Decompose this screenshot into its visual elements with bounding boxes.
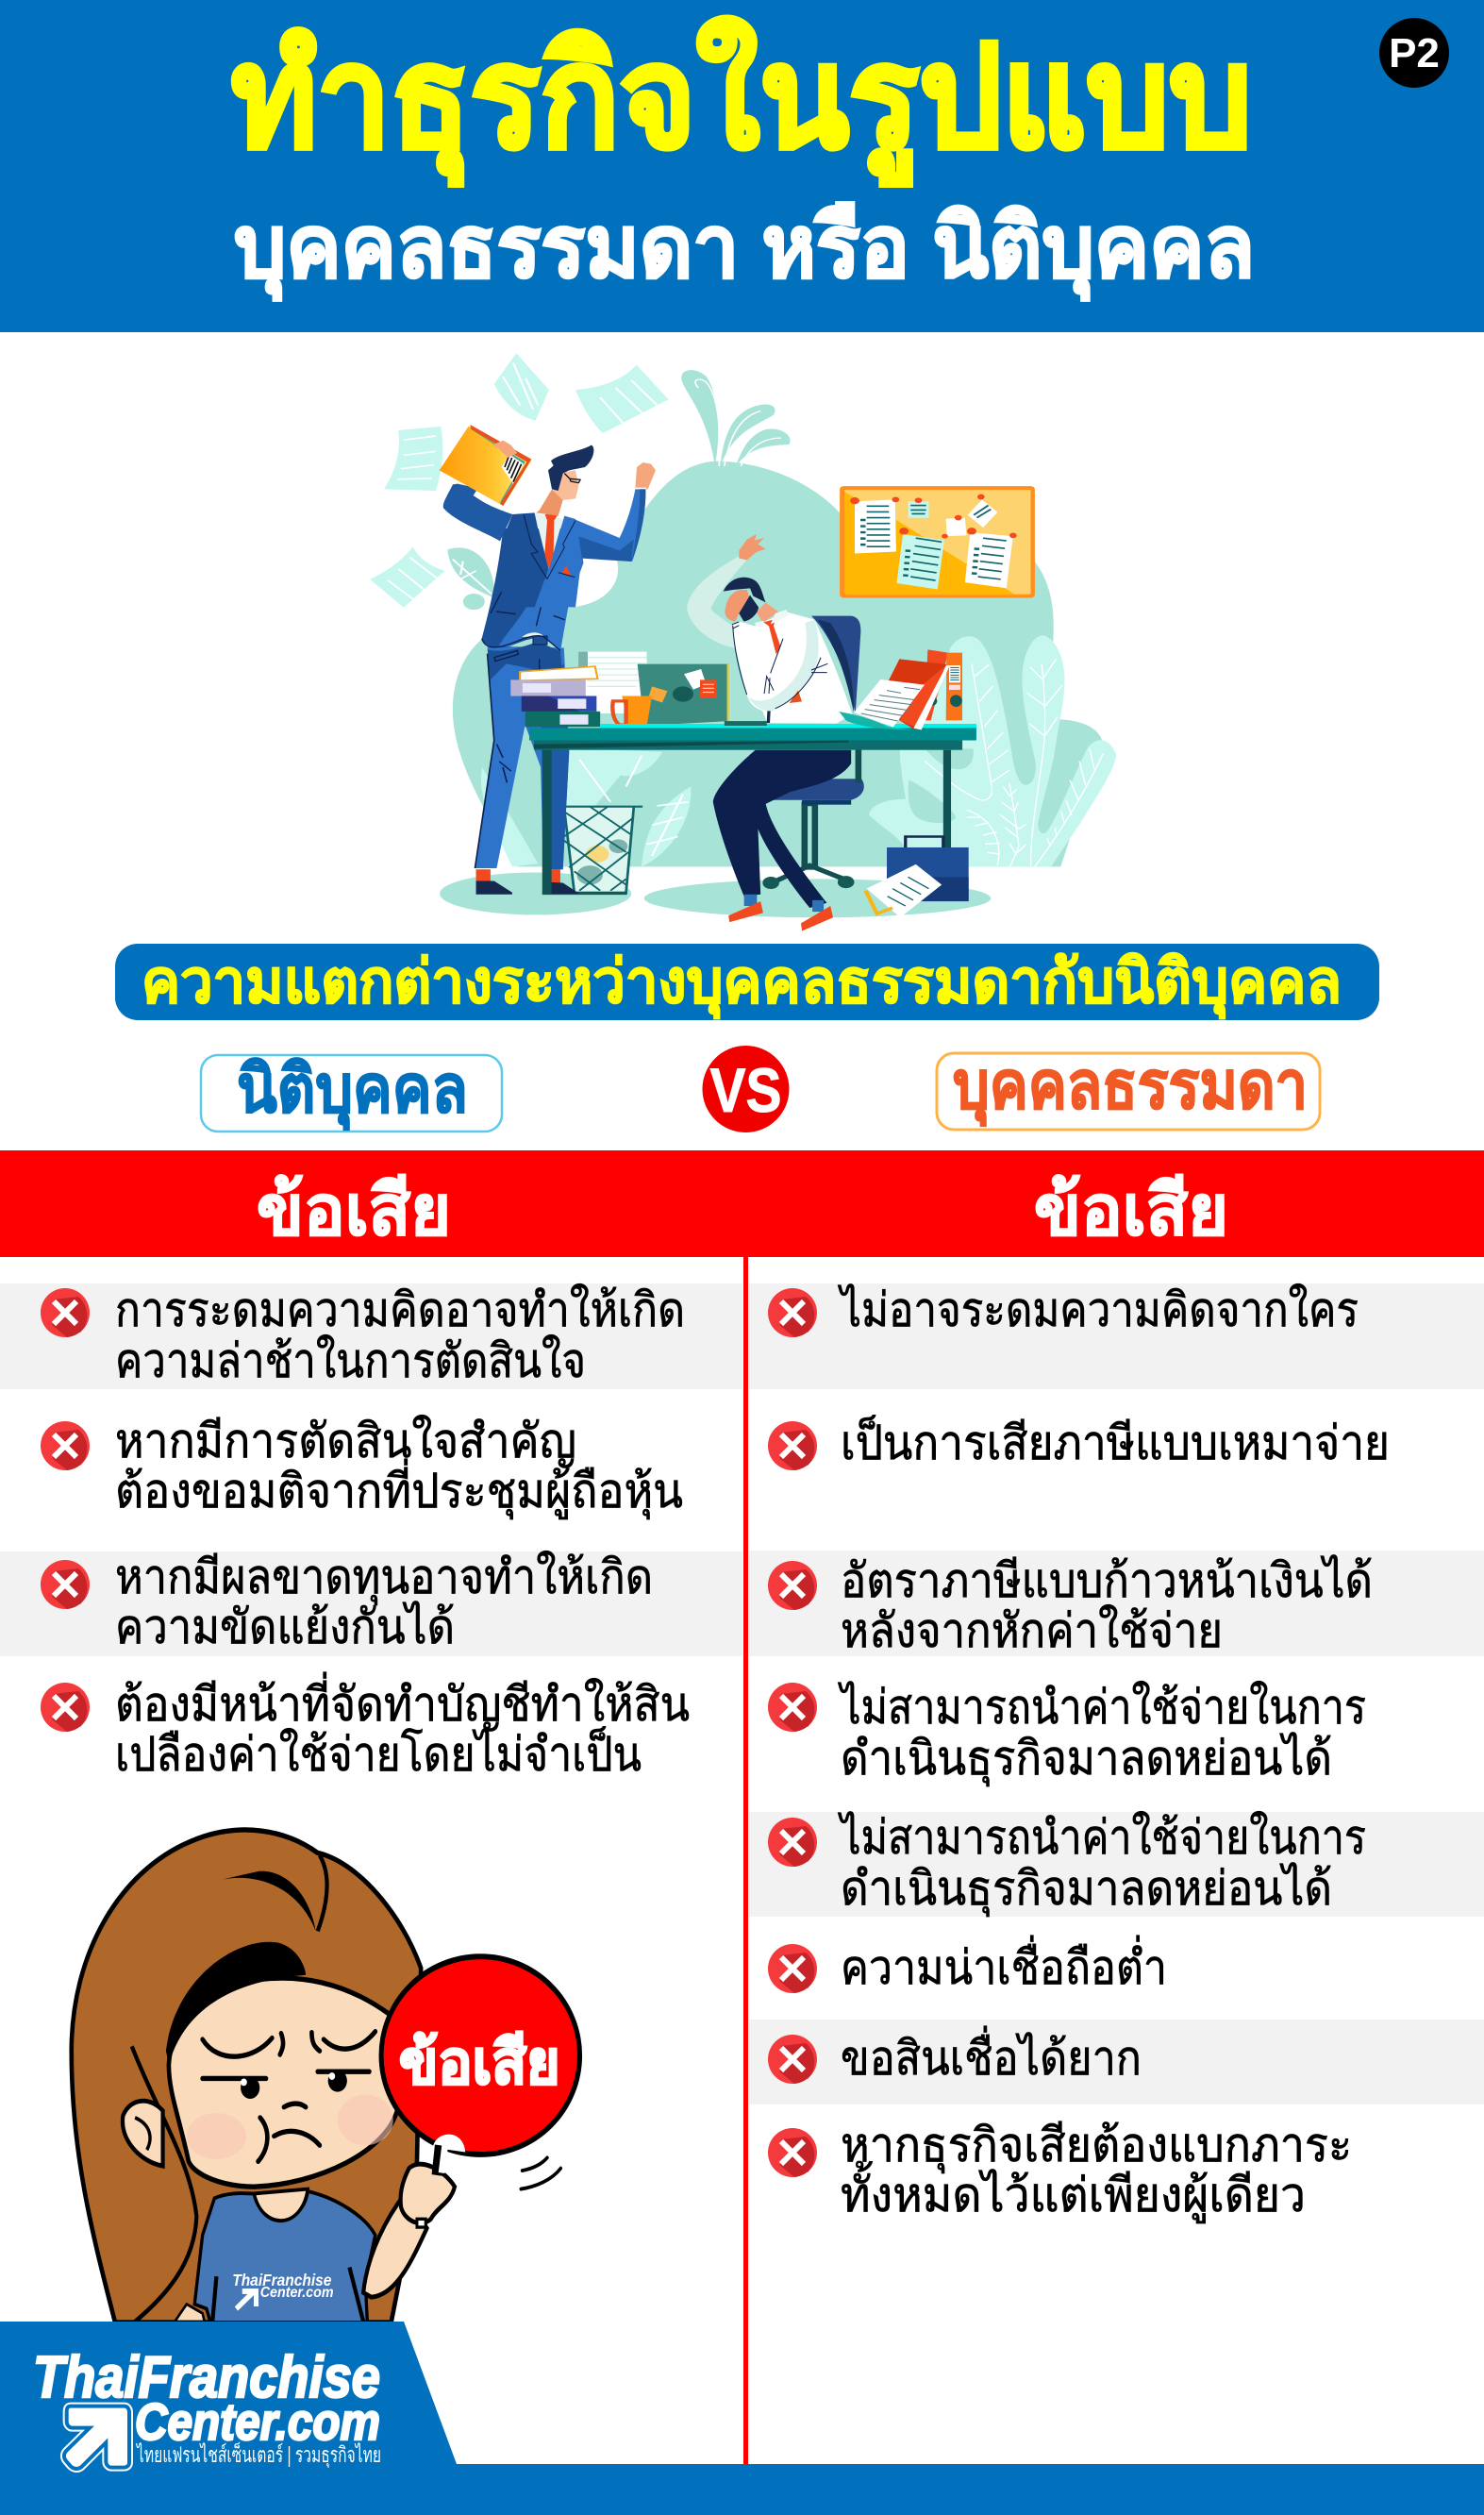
red header band <box>0 1150 1484 1257</box>
logo panel <box>0 2322 457 2468</box>
left item 4: ต้องมีหน้าที่จัดทำบัญชีทำให้สิน <box>115 1672 690 1731</box>
left item 3 <box>41 1551 653 1653</box>
right item 1: ไม่อาจระดมความคิดจากใคร <box>837 1283 1359 1336</box>
desk stack: folders, papers, mug <box>510 652 729 727</box>
plants on the right <box>869 635 1116 866</box>
right item 6 <box>768 1936 1167 1994</box>
page badge P2: P2 <box>1389 30 1440 76</box>
mascot holding sign <box>69 1827 583 2322</box>
left item 1 <box>41 1283 685 1387</box>
right item 5 <box>768 1811 1366 1917</box>
right column heading: ข้อเสีย <box>1034 1171 1228 1249</box>
left item 3: ความขัดแย้งกันได้ <box>115 1601 455 1653</box>
seated man legs and chair base <box>713 748 864 931</box>
right item 8 <box>768 2119 1352 2223</box>
right item 3: อัตราภาษีแบบก้าวหน้าเงินได้ <box>841 1554 1373 1607</box>
notice board <box>840 486 1035 597</box>
right item 2: เป็นการเสียภาษีแบบเหมาจ่าย <box>841 1415 1390 1469</box>
briefcase <box>866 837 969 917</box>
right item 5: ดำเนินธุรกิจมาลดหย่อนได้ <box>841 1862 1332 1917</box>
section banner: ความแตกต่างระหว่างบุคคลธรรมดากับนิติบุคคล <box>142 947 1342 1019</box>
mascot holding sign: ThaiFranchise <box>232 2272 331 2289</box>
top leaves <box>681 370 791 466</box>
left item 2: ต้องขอมติจากที่ประชุมผู้ถือหุ้น <box>115 1459 683 1519</box>
right item 5: ไม่สามารถนำค่าใช้จ่ายในการ <box>838 1811 1366 1864</box>
left item 4 <box>41 1672 690 1781</box>
panel: left column disadvantages <box>0 1283 742 1781</box>
left item 1: ความล่าช้าในการตัดสินใจ <box>115 1334 586 1387</box>
label: natural person: บุคคลธรรมดา <box>953 1048 1308 1127</box>
logo panel: ไทยแฟรนไชส์เซ็นเตอร์ | รวมธุรกิจไทย <box>136 2440 381 2468</box>
right item 4: ดำเนินธุรกิจมาลดหย่อนได้ <box>841 1732 1332 1786</box>
column divider <box>743 1257 748 2464</box>
left item 3: หากมีผลขาดทุนอาจทำให้เกิด <box>115 1551 653 1605</box>
right item 4 <box>768 1681 1366 1786</box>
left item 1: การระดมความคิดอาจทำให้เกิด <box>115 1283 685 1336</box>
mascot holding sign: Center.com <box>260 2285 334 2302</box>
page badge P2 <box>1379 18 1449 88</box>
trash bin <box>542 807 642 894</box>
right item 7 <box>768 2026 1142 2085</box>
label: juristic person: นิติบุคคล <box>237 1052 468 1131</box>
ear <box>123 2101 163 2166</box>
right item 7: ขอสินเชื่อได้ยาก <box>841 2026 1142 2085</box>
right item 4: ไม่สามารถนำค่าใช้จ่ายในการ <box>838 1681 1366 1734</box>
right item 8: ทั้งหมดไว้แต่เพียงผู้เดียว <box>841 2161 1306 2223</box>
arm and hand <box>363 2164 455 2297</box>
panel: right column disadvantages <box>749 1283 1484 2223</box>
title: ทำธุรกิจในรูปแบบ <box>231 17 1252 186</box>
right item 6: ความน่าเชื่อถือต่ำ <box>841 1936 1167 1994</box>
shadows <box>440 872 631 914</box>
seated man upper body <box>687 534 962 729</box>
bottom blue band <box>0 2464 1484 2515</box>
header panel <box>0 0 1484 332</box>
face <box>169 1978 397 2187</box>
logo panel: Center.com <box>135 2392 380 2451</box>
right item 8: หากธุรกิจเสียต้องแบกภาระ <box>841 2119 1352 2173</box>
illustration: boss scolding employee at desk <box>370 353 1117 931</box>
shirt <box>194 2191 375 2322</box>
logo panel: ThaiFranchise <box>33 2345 380 2410</box>
left column heading: ข้อเสีย <box>257 1171 451 1249</box>
floating papers <box>370 353 691 866</box>
subtitle: บุคคลธรรมดา หรือ นิติบุคคล <box>234 199 1255 301</box>
sign <box>381 1956 580 2155</box>
right item 3 <box>768 1554 1373 1657</box>
left item 2 <box>41 1415 683 1519</box>
icon: logo arrow <box>66 2408 127 2467</box>
left item 2: หากมีการตัดสินใจสำคัญ <box>115 1415 576 1467</box>
standing boss <box>440 425 656 895</box>
left item 4: เปลืองค่าใช้จ่ายโดยไม่จำเป็น <box>115 1726 642 1781</box>
VS badge: VS <box>709 1055 781 1125</box>
right item 3: หลังจากหักค่าใช้จ่าย <box>841 1604 1223 1657</box>
desk <box>529 721 976 894</box>
mascot holding sign: ข้อเสีย <box>399 2029 559 2096</box>
